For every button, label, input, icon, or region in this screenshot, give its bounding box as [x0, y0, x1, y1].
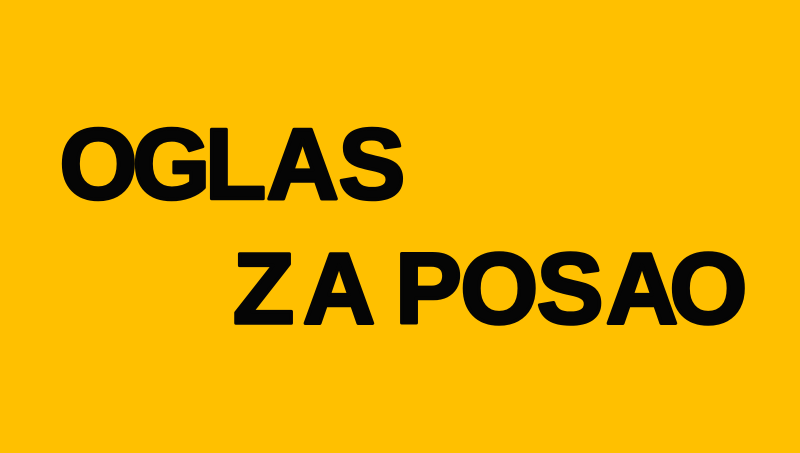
title line 2: ZA POSAO: ZA POSAO — [233, 233, 747, 345]
title line 1: OGLAS: OGLAS — [60, 108, 405, 220]
